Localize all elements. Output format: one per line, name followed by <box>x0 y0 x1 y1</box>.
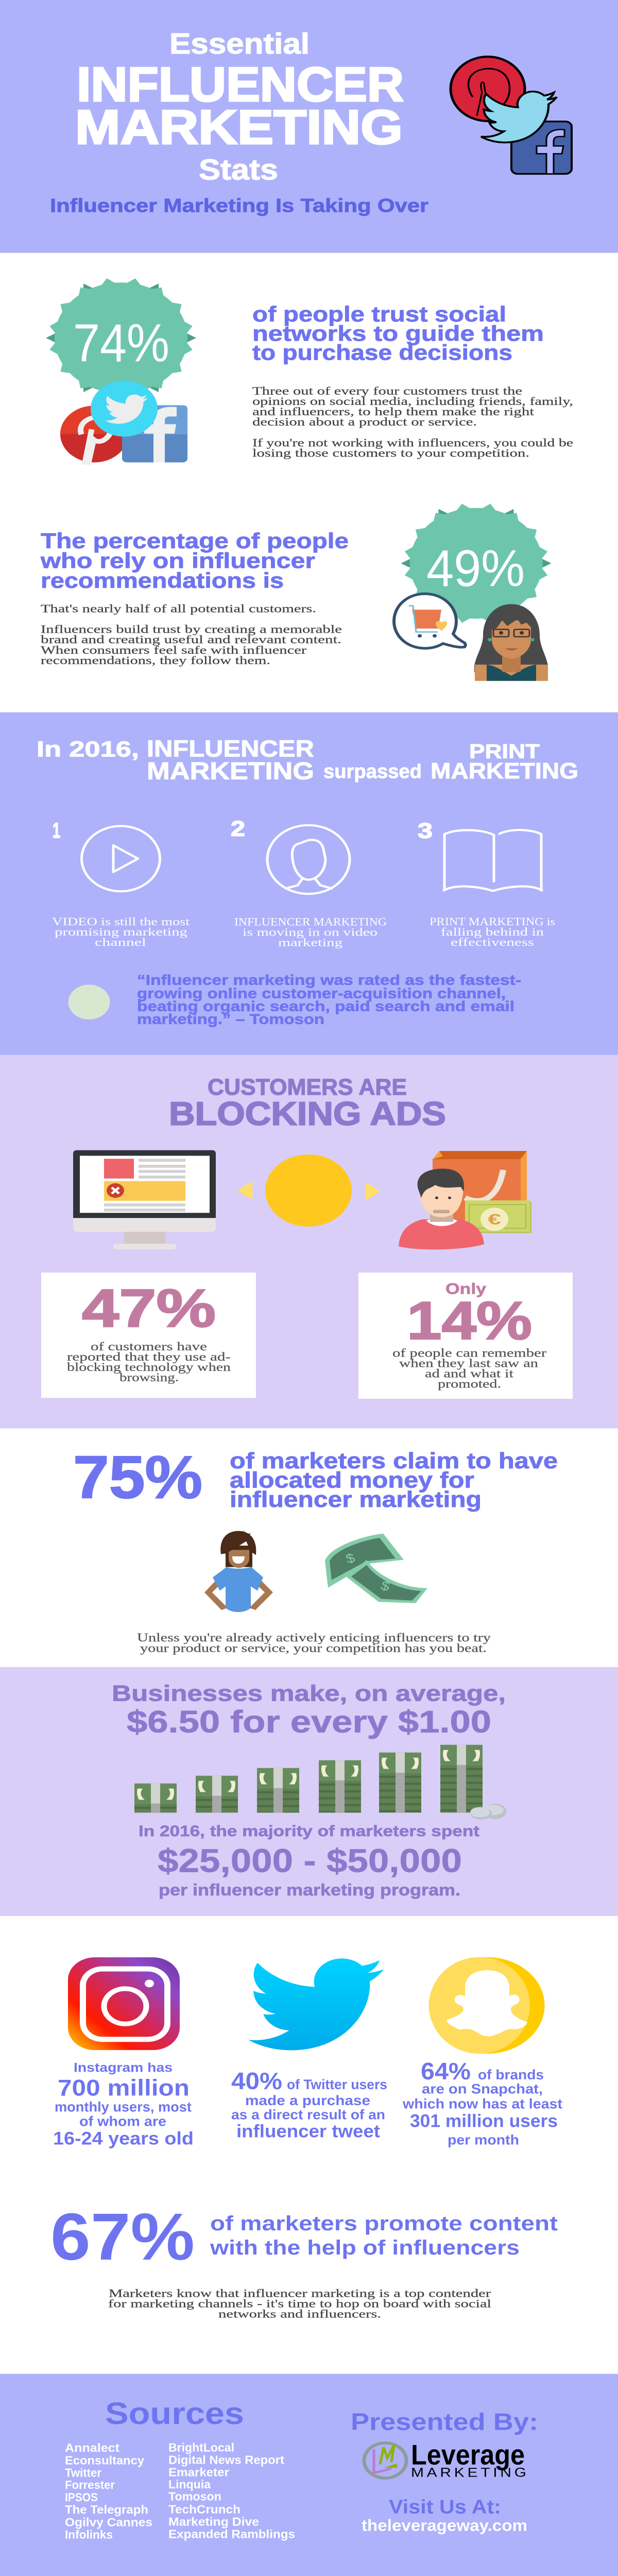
text block: competition <box>137 1631 491 1655</box>
heading: customers are blocking ads <box>169 1075 446 1132</box>
item 1: video <box>52 818 190 948</box>
icon: yellow circle with arrows <box>237 1155 380 1227</box>
panel: 2016 channels <box>0 712 618 1055</box>
heading: allocated money: of marketers claim to have <box>230 1449 558 1473</box>
icon: speech bubble with cart <box>394 594 466 648</box>
text block: 49% body: brand and creating useful and relevant content. <box>41 633 341 646</box>
text block: snapchat <box>402 2057 562 2148</box>
item 1: video: VIDEO is still the most <box>52 916 190 928</box>
heading: In 2016 surpassed: In 2016, <box>37 737 139 761</box>
logo: Leverage Marketing <box>364 2439 526 2480</box>
text block: spend: per influencer marketing program. <box>159 1881 460 1899</box>
text block: spend <box>139 1823 479 1899</box>
icon: pinterest outline <box>451 57 525 121</box>
badge: 74% <box>46 278 196 397</box>
card: 14%: when they last saw an <box>399 1357 538 1370</box>
text block: snapchat: 301 million users <box>410 2111 558 2131</box>
list: sources column 2: Digital News Report <box>168 2454 284 2467</box>
heading: promote content: of marketers promote content <box>210 2212 558 2235</box>
heading: In 2016 surpassed: MARKETING <box>147 758 314 785</box>
text block: 49% body: Influencers build trust by creating a memorable <box>41 623 342 636</box>
card: 14%: promoted. <box>438 1377 501 1391</box>
icon: woman with glasses <box>474 604 548 681</box>
text block: contender <box>108 2287 491 2320</box>
subtitle: Influencer Marketing Is Taking Over <box>50 195 428 216</box>
list: sources column 1: Infolinks <box>65 2529 113 2541</box>
panel: return on spend <box>0 1667 618 1916</box>
list: sources column 1: Forrester <box>65 2479 115 2492</box>
list: sources column 2: Expanded Ramblings <box>168 2528 295 2541</box>
item 2: influencer: INFLUENCER MARKETING <box>234 917 387 928</box>
text block: contender: networks and influencers. <box>218 2308 381 2320</box>
logo: Leverage Marketing: Leverage <box>411 2439 525 2470</box>
icon: green banknotes arrow: $ <box>344 1550 357 1566</box>
list: sources column 1: Econsultancy <box>65 2454 145 2467</box>
text block: 74% body: losing those customers to your competition. <box>252 447 529 460</box>
card: 47%: of customers have <box>91 1340 207 1353</box>
text block: 74% body: If you're not working with influencers, you could be <box>252 437 573 449</box>
item 3: print: falling behind in <box>441 926 544 938</box>
list: sources column 1: Annalect <box>65 2442 119 2455</box>
title: Essential: Essential <box>169 27 310 60</box>
heading: return: Businesses make, on average, <box>112 1682 506 1706</box>
item 3: print <box>418 819 555 948</box>
icon: monitor with blocked ad <box>73 1150 216 1249</box>
heading: 74% statement: of people trust social <box>252 302 506 326</box>
list: sources column 2: Tomoson <box>168 2490 221 2503</box>
heading: return: $6.50 for every $1.00 <box>127 1705 491 1739</box>
card: 47%: 47% <box>82 1279 216 1338</box>
text block: 49% body: When consumers feel safe with influencer <box>41 644 307 657</box>
text block: twitter: of Twitter users <box>287 2077 387 2092</box>
text block: 74% body: Three out of every four customers trust the <box>252 385 522 397</box>
text block: contender: for marketing channels - it's time to hop on board with social <box>108 2297 491 2310</box>
text block: twitter <box>231 2067 387 2141</box>
quote: “Influencer marketing was rated as the fastest- <box>137 973 521 988</box>
badge: 49% <box>401 504 551 623</box>
text block: 49% body <box>41 602 342 667</box>
item 2: influencer: 2 <box>231 816 245 841</box>
text block: spend: $25,000 - $50,000 <box>158 1842 462 1879</box>
item 3: print: PRINT MARKETING is <box>430 916 555 928</box>
panel: blocking ads <box>0 1055 618 1428</box>
list: sources column 1: The Telegraph <box>65 2503 148 2517</box>
item 2: influencer <box>231 816 387 949</box>
heading: Sources: Sources <box>105 2397 244 2431</box>
card: 47%: blocking technology when <box>67 1360 231 1374</box>
heading: In 2016 surpassed: PRINT <box>469 740 540 763</box>
item 2: influencer: marketing <box>278 937 342 949</box>
list: sources column 2: Linquia <box>168 2478 211 2491</box>
link text: website: theleverageway.com <box>362 2516 527 2535</box>
heading: Presented By: Presented By: <box>351 2408 538 2435</box>
text block: 74% body: and influencers, to help them make the right <box>252 405 534 418</box>
list: sources column 1: Ogilvy Cannes <box>65 2516 152 2529</box>
card: 14% <box>358 1273 573 1399</box>
quote: growing online customer-acquisition channel, <box>137 986 506 1002</box>
text block: contender: Marketers know that influencer marketing is a top contender <box>109 2287 491 2300</box>
heading: In 2016 surpassed: MARKETING <box>431 759 578 784</box>
list: sources column 2 <box>168 2441 295 2541</box>
stat: 75%: 75% <box>73 1444 202 1511</box>
heading: customers are blocking ads: BLOCKING ADS <box>169 1095 446 1132</box>
bar chart: cash stacks <box>134 1745 506 1820</box>
card: 14%: Only <box>445 1280 487 1298</box>
icon: smiling woman <box>204 1530 273 1612</box>
icon: green banknotes arrow: $ <box>379 1578 392 1594</box>
list: sources column 1: IPSOS <box>65 2491 98 2504</box>
card: 47% <box>41 1273 256 1398</box>
text block: snapchat: which now has at least <box>402 2096 562 2112</box>
icon: twitter <box>248 1958 384 2050</box>
heading: 74% statement: to purchase decisions <box>252 340 512 364</box>
icon: person with bag and cash <box>399 1151 531 1249</box>
heading: promote content <box>210 2212 558 2259</box>
heading: allocated money <box>230 1449 558 1512</box>
heading: Visit Us At: Visit Us At: <box>389 2496 501 2517</box>
item 1: video: channel <box>95 937 146 948</box>
text block: instagram <box>53 2060 194 2149</box>
list: sources column 2: Emarketer <box>168 2466 229 2479</box>
item 1: video: promising marketing <box>55 926 187 938</box>
text block: snapchat: are on Snapchat, <box>422 2081 543 2097</box>
text block: twitter: made a purchase <box>245 2093 370 2108</box>
heading: In 2016 surpassed: INFLUENCER <box>147 735 314 761</box>
heading: In 2016 surpassed: surpassed <box>323 760 422 782</box>
text block: snapchat: of brands <box>478 2067 544 2082</box>
item 3: print: 3 <box>418 819 433 843</box>
text block: instagram: of whom are <box>79 2114 166 2129</box>
title: Stats: Stats <box>199 154 278 186</box>
card: 47%: browsing. <box>119 1370 179 1384</box>
heading: customers are blocking ads: CUSTOMERS ARE <box>208 1075 407 1100</box>
logo: Leverage Marketing: MARKETING <box>411 2465 526 2480</box>
stat: 67%: 67% <box>50 2200 195 2274</box>
item 1: video: 1 <box>53 818 60 842</box>
text block: 74% body: opinions on social media, including friends, family, <box>252 395 573 408</box>
text block: competition: Unless you're already actively enticing influencers to try <box>137 1631 491 1644</box>
heading: 49% statement: The percentage of people <box>41 529 349 553</box>
heading: promote content: with the help of influencers <box>210 2236 520 2259</box>
panel: platforms <box>0 1916 618 2374</box>
text block: twitter: 40% <box>231 2067 282 2094</box>
icon: twitter outline <box>481 92 556 142</box>
text block: instagram: 16-24 years old <box>53 2129 194 2149</box>
text block: 49% body: recommendations, they follow them. <box>41 654 270 667</box>
card: 14%: of people can remember <box>392 1346 547 1360</box>
text block: instagram: Instagram has <box>74 2060 173 2075</box>
heading: 49% statement: recommendations is <box>41 568 284 592</box>
icon: facebook outline <box>511 122 572 174</box>
heading: 74% statement: networks to guide them <box>252 321 544 346</box>
list: sources column 2: TechCrunch <box>168 2503 241 2516</box>
panel: 75% allocated money <box>0 1428 618 1667</box>
icon: instagram <box>68 1957 180 2050</box>
text block: instagram: monthly users, most <box>55 2099 192 2115</box>
panel: header <box>0 0 618 253</box>
heading: allocated money: allocated money for <box>230 1468 474 1493</box>
icon: person with bag and cash: € <box>488 1211 501 1228</box>
text block: 74% body: decision about a product or service. <box>252 416 477 428</box>
heading: return <box>112 1682 506 1739</box>
icon: green banknotes arrow <box>325 1534 427 1603</box>
text block: competition: your product or service, your competition has you beat. <box>140 1641 487 1655</box>
panel: trust stats <box>0 253 618 712</box>
badge: 74%: 74% <box>73 313 169 373</box>
item 2: influencer: is moving in on video <box>243 927 377 939</box>
card: 14%: 14% <box>407 1291 532 1351</box>
list: sources column 2: Marketing Dive <box>168 2516 259 2529</box>
panel: footer <box>0 2374 618 2576</box>
heading: 49% statement <box>40 529 349 592</box>
quote: marketing.” – Tomoson <box>137 1012 324 1027</box>
text block: twitter: as a direct result of an <box>231 2107 385 2123</box>
icon: pale green dot <box>68 985 110 1020</box>
item 3: print: effectiveness <box>451 937 534 948</box>
list: sources column 1 <box>65 2442 152 2541</box>
title: MARKETING: MARKETING <box>75 100 403 155</box>
text block: twitter: influencer tweet <box>236 2122 380 2141</box>
title: INFLUENCER: INFLUENCER <box>77 58 404 111</box>
text block: spend: In 2016, the majority of marketers spent <box>139 1823 479 1840</box>
badge: 49%: 49% <box>426 540 525 597</box>
card: 47%: reported that they use ad- <box>67 1350 231 1363</box>
card: 14%: ad and what it <box>425 1367 513 1380</box>
heading: In 2016 surpassed <box>37 735 578 785</box>
list: sources column 2: BrightLocal <box>168 2441 234 2454</box>
heading: allocated money: influencer marketing <box>230 1487 482 1512</box>
heading: 74% statement <box>252 302 544 364</box>
icon: snapchat <box>428 1957 545 2054</box>
text block: snapchat: 64% <box>421 2057 471 2084</box>
icon: social trio <box>60 381 187 463</box>
text block: snapchat: per month <box>448 2132 519 2148</box>
quote <box>137 973 521 1027</box>
text block: 74% body <box>252 385 573 460</box>
heading: 49% statement: who rely on influencer <box>40 548 315 573</box>
list: sources column 1: Twitter <box>65 2467 101 2480</box>
text block: 49% body: That's nearly half of all potential customers. <box>41 602 316 615</box>
text block: instagram: 700 million <box>58 2076 190 2100</box>
quote: beating organic search, paid search and email <box>137 999 514 1014</box>
